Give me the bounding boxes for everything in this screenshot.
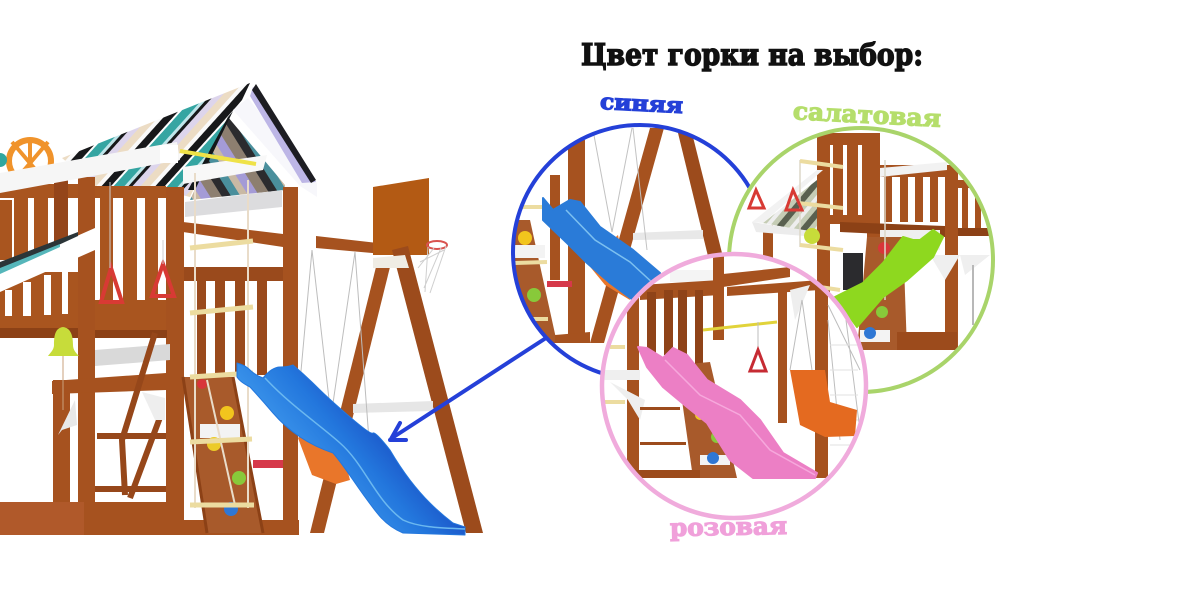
pink ring bbox=[602, 254, 866, 518]
roof left panel bbox=[62, 83, 250, 197]
green ring bbox=[729, 128, 993, 392]
roof right panel bbox=[188, 84, 317, 197]
label: blue: синяя bbox=[599, 89, 684, 119]
yellow bar bbox=[180, 151, 256, 164]
blue slide bbox=[237, 363, 465, 535]
ship wheel bbox=[0, 138, 51, 184]
white cross bar bbox=[353, 401, 433, 413]
swing ropes bbox=[300, 250, 369, 440]
ladder diagonals bbox=[95, 333, 166, 498]
blue circle photo bbox=[515, 128, 722, 343]
floor beams bbox=[0, 328, 167, 338]
orange swing seat bbox=[298, 405, 350, 484]
white left brace bbox=[58, 400, 77, 435]
white board bbox=[95, 344, 170, 366]
green circle photo bbox=[749, 133, 990, 350]
white brace bbox=[142, 392, 165, 420]
climbing holds bbox=[197, 379, 246, 516]
backboard and hoop bbox=[373, 178, 447, 293]
pink circle photo bbox=[600, 255, 865, 478]
back fence bbox=[183, 267, 283, 375]
panel: blue slide circle bbox=[511, 123, 750, 375]
rope ladder bbox=[190, 173, 254, 508]
label: pink: розовая bbox=[670, 511, 787, 542]
cross beam bbox=[52, 373, 166, 394]
main posts bbox=[53, 177, 298, 533]
panel: green slide circle bbox=[729, 128, 993, 392]
roof gable bbox=[190, 117, 285, 200]
pink disc bbox=[603, 255, 865, 517]
label: green: салатовая bbox=[792, 96, 942, 133]
bell cord bbox=[62, 356, 64, 410]
A-frame legs bbox=[310, 246, 483, 533]
arrow bbox=[390, 338, 546, 440]
green disc bbox=[730, 129, 992, 391]
playset illustration bbox=[0, 83, 483, 535]
title: Цвет горки на выбор: bbox=[581, 38, 923, 73]
sloping white roof bbox=[0, 228, 95, 292]
white beam bbox=[0, 142, 267, 193]
panel: pink slide circle bbox=[600, 254, 866, 518]
grey soffit bbox=[185, 190, 282, 217]
sandbox bbox=[0, 502, 299, 535]
gymnastic rings bbox=[101, 182, 174, 302]
blue ring bbox=[513, 125, 767, 379]
swing beam bbox=[183, 222, 395, 255]
upper fence bbox=[0, 180, 166, 332]
bell bbox=[48, 327, 79, 356]
climbing wall bbox=[183, 377, 263, 533]
A-frame bracket bbox=[373, 255, 409, 268]
red swing bbox=[253, 460, 283, 468]
lower fence gaps bbox=[5, 268, 68, 316]
